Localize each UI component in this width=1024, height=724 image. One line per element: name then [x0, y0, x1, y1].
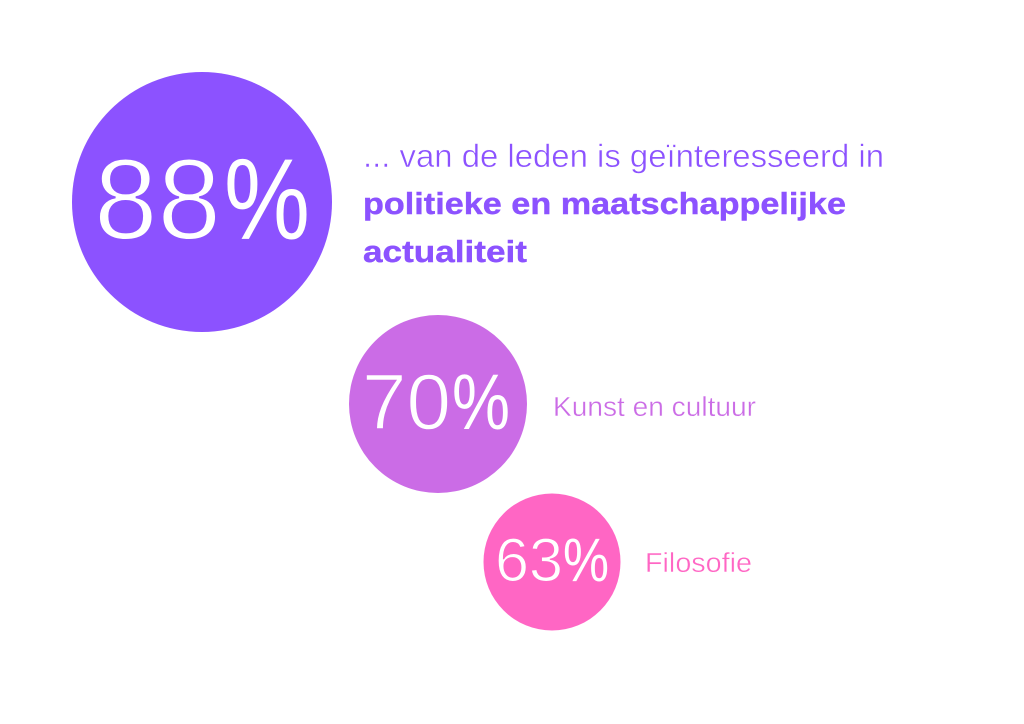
main statement text: politieke en maatschappelijke	[363, 186, 846, 221]
circle: 88%: %	[224, 136, 310, 264]
main statement text	[363, 138, 884, 269]
circle: 70%	[349, 315, 527, 493]
circle: 88%: 88	[94, 136, 221, 264]
label: Kunst en cultuur: Kunst en cultuur	[553, 391, 756, 422]
label: Filosofie: Filosofie	[645, 547, 752, 578]
circle: 88%	[72, 72, 332, 332]
main statement text: actualiteit	[363, 234, 527, 269]
circle: 70%: %	[452, 357, 510, 446]
circle: 63%: 63	[495, 526, 563, 594]
circle: 63%	[484, 494, 620, 630]
circle: 70%: 70	[362, 357, 451, 446]
main statement text: ... van de leden is geïnteresseerd in	[363, 138, 884, 174]
circle: 63%: %	[563, 526, 609, 594]
